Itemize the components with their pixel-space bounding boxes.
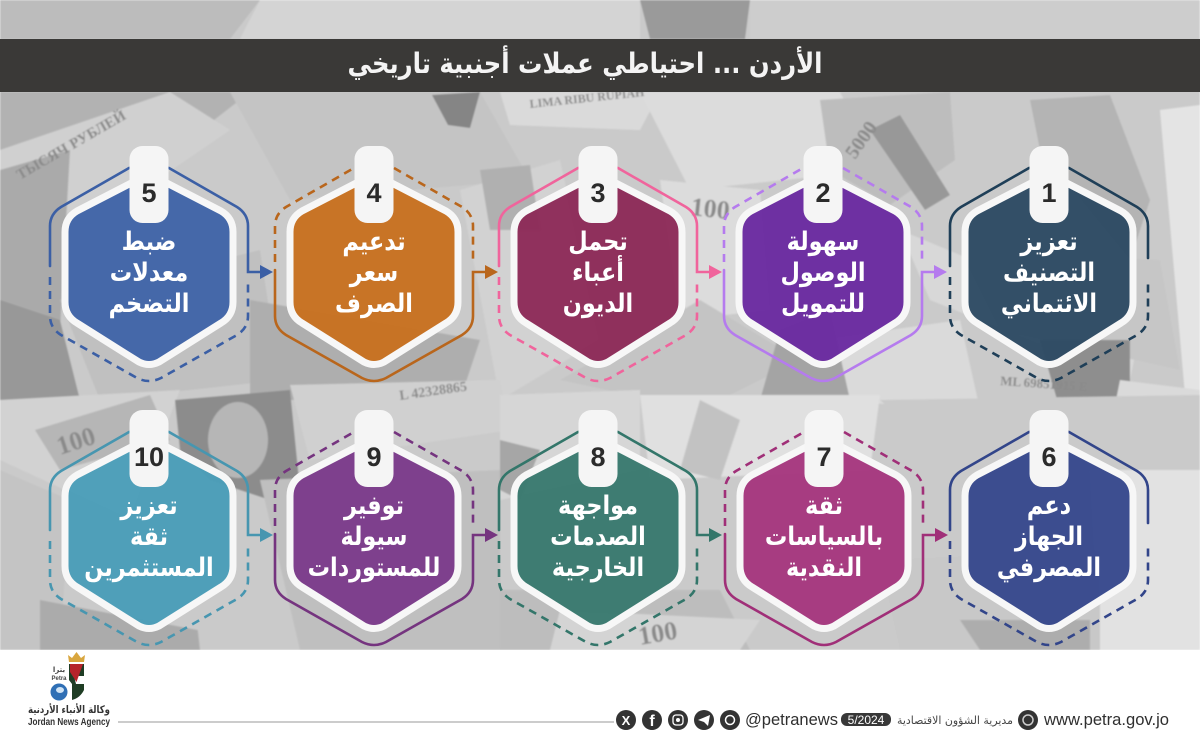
label: توفير	[343, 489, 404, 520]
label: الخارجية	[552, 551, 644, 582]
label: سعر	[349, 256, 398, 287]
flag white	[74, 676, 84, 684]
outline dashed	[499, 541, 697, 645]
label: الديون	[563, 287, 633, 318]
arrowhead	[709, 528, 722, 542]
outline solid	[950, 432, 1148, 530]
logo: Jordan News Agency	[28, 652, 110, 728]
agency latin: Jordan News Agency	[28, 716, 110, 728]
arrowhead	[485, 265, 498, 279]
globe icon	[1018, 710, 1038, 730]
icon: whatsapp	[720, 710, 740, 730]
outline dashed	[950, 277, 1148, 381]
background: banknote collage: 5000	[841, 117, 882, 163]
outline dashed	[725, 432, 923, 528]
outline solid	[950, 168, 1148, 266]
label: سيولة	[340, 520, 408, 551]
hexagon	[965, 176, 1133, 364]
outline dashed	[950, 541, 1148, 645]
petra latin: Petra	[51, 676, 67, 682]
outline dashed	[275, 168, 473, 264]
hexagon	[290, 440, 458, 628]
flag shield	[69, 664, 84, 700]
number tab	[354, 146, 394, 223]
label: التصنيف	[1003, 256, 1095, 287]
arrowhead	[260, 528, 273, 542]
icon: x	[616, 710, 636, 730]
card 1	[950, 146, 1148, 381]
number: 4	[366, 178, 382, 208]
card 3	[499, 146, 722, 381]
number tab	[578, 410, 618, 487]
website: www.petra.gov.jo	[1043, 710, 1169, 729]
label: تدعيم	[342, 225, 406, 256]
flag red	[70, 664, 83, 682]
handle: @petranews	[745, 710, 838, 729]
label: ثقة	[805, 489, 843, 520]
label: للمستوردات	[308, 551, 440, 582]
hexagon	[739, 176, 907, 364]
outline solid with arrow	[499, 168, 710, 272]
number tab	[804, 146, 842, 223]
outline dashed	[50, 541, 248, 645]
label: تعزيز	[1019, 225, 1078, 256]
arrowhead	[709, 265, 722, 279]
label: الجهاز	[1014, 520, 1083, 551]
globe	[50, 684, 68, 700]
outline dashed	[275, 432, 473, 528]
petra arabic: بترا	[53, 666, 65, 674]
label: دعم	[1027, 489, 1071, 520]
label: الائتماني	[1001, 287, 1097, 318]
number: 6	[1041, 442, 1057, 472]
label: الصدمات	[550, 520, 646, 551]
icon: facebook: f	[649, 713, 655, 730]
label: بالسياسات	[765, 520, 883, 551]
number tab	[1030, 410, 1068, 487]
outline dashed	[724, 168, 922, 264]
number tab	[130, 410, 168, 487]
arrowhead	[935, 528, 948, 542]
hexagon	[290, 176, 458, 364]
card 2	[724, 146, 947, 381]
card 6	[950, 410, 1148, 645]
card 9	[275, 410, 498, 645]
label: المستثمرين	[84, 551, 214, 582]
background: banknote collage: 100	[53, 421, 99, 461]
title bar	[0, 39, 1200, 92]
label: معدلات	[110, 256, 188, 287]
label: الصرف	[335, 287, 413, 318]
hexagon	[65, 440, 233, 628]
icon: instagram	[668, 710, 688, 730]
agency arabic: وكالة الأنباء الأردنية	[28, 703, 110, 716]
outline solid with arrow	[275, 534, 486, 645]
hexagon	[65, 176, 233, 364]
arrowhead	[934, 265, 947, 279]
background: banknote collage: ТЫСЯЧ РУБЛЕЙ	[14, 107, 129, 183]
label: مواجهة	[558, 489, 638, 520]
hexagon	[740, 440, 908, 628]
label: أعباء	[572, 255, 624, 287]
outline solid with arrow	[275, 270, 486, 381]
card 10	[50, 410, 273, 645]
hexagon	[965, 440, 1133, 628]
background: banknote collage: 100	[689, 192, 731, 225]
number: 3	[590, 178, 606, 208]
number tab	[804, 410, 844, 487]
label: ضبط	[122, 225, 176, 256]
card 5	[50, 146, 273, 381]
icon: facebook	[642, 710, 662, 730]
label: سهولة	[787, 225, 859, 256]
outline dashed	[499, 277, 697, 381]
label: النقدية	[786, 551, 862, 582]
number: 1	[1041, 178, 1057, 208]
arrowhead	[485, 528, 498, 542]
number: 5	[141, 178, 157, 208]
outline dashed	[50, 277, 248, 381]
arrowhead	[260, 265, 273, 279]
title text: الأردن ... احتياطي عملات أجنبية تاريخي	[348, 45, 822, 80]
crown	[68, 652, 85, 662]
outline solid with arrow	[50, 432, 261, 535]
background: banknote collage: LIMA RIBU RUPIAH	[529, 85, 646, 111]
number tab	[578, 146, 618, 223]
number tab	[130, 146, 168, 223]
icon: x: X	[622, 713, 631, 728]
label: التضخم	[109, 287, 189, 318]
date badge: 5/2024	[848, 713, 885, 727]
card 4	[275, 146, 498, 381]
number: 7	[816, 442, 832, 472]
outline solid with arrow	[724, 270, 935, 381]
hexagon	[514, 176, 682, 364]
label: المصرفي	[997, 551, 1101, 582]
number: 9	[366, 442, 382, 472]
number tab	[1030, 146, 1068, 223]
hexagon	[514, 440, 682, 628]
label: تحمل	[568, 225, 628, 256]
number: 2	[815, 178, 831, 208]
label: تعزيز	[119, 489, 178, 520]
card 7	[725, 410, 948, 645]
background: banknote collage: 100	[636, 616, 679, 651]
footer	[0, 650, 1200, 748]
label: الوصول	[780, 256, 866, 287]
background: banknote collage: L 42328865	[398, 380, 468, 404]
outline solid with arrow	[725, 534, 936, 645]
number: 8	[590, 442, 606, 472]
label: ثقة	[130, 520, 168, 551]
label: للتمويل	[781, 287, 865, 318]
number: 10	[134, 442, 164, 472]
number tab	[354, 410, 394, 487]
card 8	[499, 410, 722, 645]
outline solid with arrow	[499, 432, 710, 535]
background: banknote collage: ML 69851915 E	[1000, 373, 1088, 394]
department: مديرية الشؤون الاقتصادية	[897, 714, 1013, 727]
outline solid with arrow	[50, 168, 261, 272]
icon: telegram	[694, 710, 714, 730]
